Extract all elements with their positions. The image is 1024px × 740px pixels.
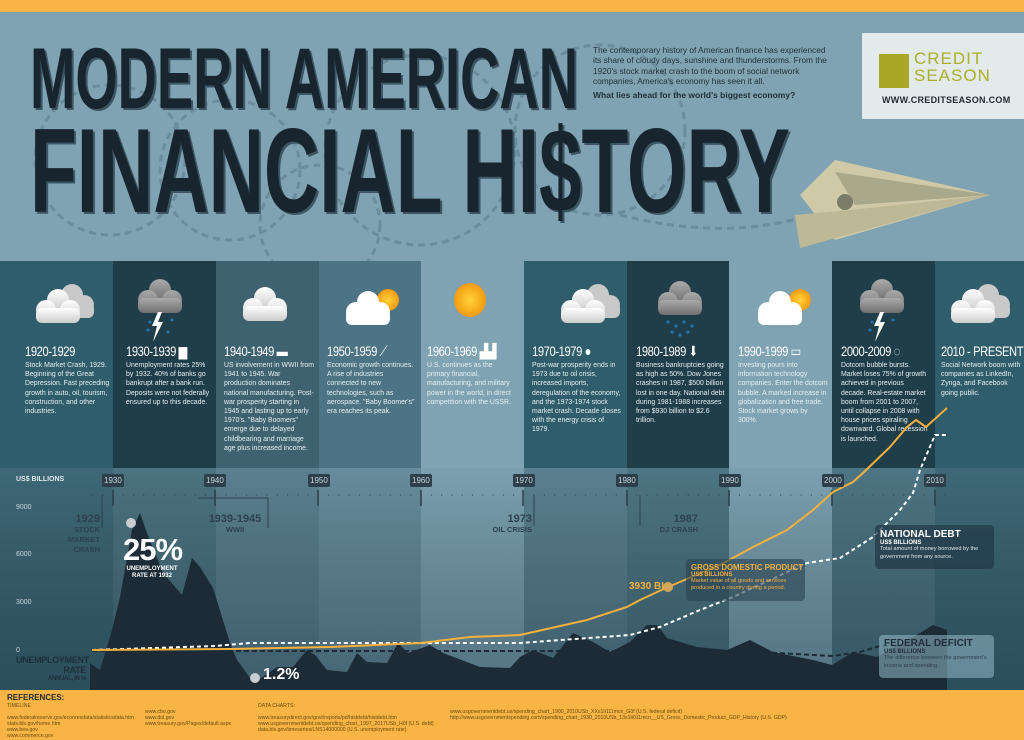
references: www.dol.gov [145, 715, 174, 721]
label: unemployment rate: ANNUAL, IN % [48, 676, 86, 682]
callout: federal deficit: The difference between the government's income and spending. [884, 655, 987, 668]
decade: 1960s: U.S. continues as the primary financial, manufacturing, and military power in the world, in direct competition with the USSR. [427, 362, 511, 406]
decade: 1990s: 1990-1999 ▭ [738, 343, 801, 359]
year labels: 1930 [104, 476, 122, 485]
icon: cloudy 1970s [561, 284, 620, 323]
event: 1929 crash [68, 513, 100, 554]
text: 9000 [16, 504, 32, 511]
decade columns [0, 261, 113, 468]
text: 2010 [926, 476, 944, 485]
references: TIMELINE [7, 703, 31, 709]
label: 3930 BI: 3930 BI [629, 581, 664, 592]
decade: 2010: 2010 - PRESENT [941, 343, 1023, 359]
references: www.usgovernmentdebt.us/spending_chart_1997_2017USb_H0f (U.S. debt) [258, 721, 434, 727]
decade: 1960s: 1960-1969 ▟▟ [427, 343, 496, 359]
callout: national debt: NATIONAL DEBT [880, 529, 961, 540]
decade: 1970s: Post-war prosperity ends in 1973 due to oil crisis, increased imports, deregulation of the economy, and the 1973-1974 stock market crash. Decade closes with the energy crisis of 1979. [532, 362, 621, 433]
decade: 1950s: 1950-1959 ⟋ [327, 343, 387, 359]
references: www.cbo.gov [145, 709, 176, 715]
event: WWII: 1939-1945 [209, 513, 261, 525]
text: 1980 [618, 476, 636, 485]
icon: sun cloud 1990s [758, 289, 811, 325]
event: oil crisis: 1973 [508, 513, 532, 525]
icon: storm 2000s [860, 279, 904, 342]
intro text: What lies ahead for the world's biggest economy? [593, 90, 795, 100]
label: unemployment rate: UNEMPLOYMENT [16, 655, 89, 665]
event: 1929 crash: STOCK [74, 525, 100, 534]
callout: GDP [686, 559, 805, 601]
decade: 1960s [427, 342, 511, 406]
event: DJ crash [660, 513, 698, 534]
decade: 1940s: 1940-1949 ▬ [224, 343, 287, 359]
decorative dashed circles [34, 44, 794, 261]
icon: cloud 1940s [243, 287, 287, 321]
weather icons [36, 279, 1010, 342]
decade: 1950s: Economic growth continues. A rise of industries connected to new technologies, such as aerospace. "Baby Boomer's" era reaches its peak. [327, 362, 414, 415]
references: DATA CHARTS: [258, 703, 295, 709]
callout: 1.2%: 1.2% [263, 666, 299, 683]
references: www.commerce.gov [7, 733, 53, 739]
callout: 25%: RATE AT 1932 [132, 573, 172, 579]
label: unemployment rate: RATE [63, 664, 86, 674]
decade: 1920s: Stock Market Crash, 1929. Beginning of the Great Depression. Fast preceding growth in auto, oil, tourism, construction, and other industries. [25, 362, 109, 415]
icon: cloudy 1920s [36, 284, 94, 323]
decade: 1990s: Investing pours into information technology companies. Enter the dotcom bubble. A marked increase in globalization and free trade. Stock market grows by 300%. [738, 362, 828, 424]
event: WWII: WWII [226, 525, 244, 534]
decade: 1930s: 1930-1939 ▆ [126, 343, 187, 359]
federal deficit line [92, 645, 947, 656]
logo [862, 33, 1024, 119]
text: 2000 [824, 476, 842, 485]
unemployment area [90, 513, 947, 690]
callout: 25%: UNEMPLOYMENT [126, 566, 178, 572]
icon: rain 1980s [658, 281, 702, 337]
callout: GDP: Market value of all goods and services produced in a country during a period. [691, 578, 786, 591]
event: WWII [209, 513, 261, 534]
text: 1970 [515, 476, 533, 485]
icon: storm 1930s [138, 279, 182, 342]
text: 1940 [206, 476, 224, 485]
callout: 25%: 25% [123, 532, 182, 567]
references: http://www.usgovernmentspending.com/spending_chart_1930_2010USb_13s1li011mcn__US_Gross_Domestic_Product_GDP_History (U.S. GDP) [450, 715, 787, 721]
chart [0, 407, 1024, 690]
event: 1929 crash: 1929 [76, 513, 100, 525]
event: oil crisis [492, 513, 532, 534]
title [30, 31, 792, 230]
references: www.treasury.gov/Pages/default.aspx [145, 721, 231, 727]
text: 1950 [310, 476, 328, 485]
intro text: The contemporary history of American finance has experienced its share of cloudy days, sunshine and thunderstorms. From the 1920's stock market crash to the boom of social network companies, America's economy has seen it all. [593, 45, 827, 86]
event: 1929 crash: MARKET [68, 535, 100, 544]
GDP line [92, 408, 947, 650]
decade: 1970s: 1970-1979 ● [532, 343, 591, 359]
callout: federal deficit: US$ BILLIONS [884, 649, 925, 655]
decade: 2000s: 2000-2009 ◌ [841, 343, 900, 359]
callout: national debt [875, 525, 994, 569]
text: 0 [16, 647, 20, 654]
text: 3000 [16, 599, 32, 606]
icon: sun cloud 1950s [346, 289, 399, 325]
decade: 1920s: 1920-1929 [25, 343, 75, 359]
text: 6000 [16, 551, 32, 558]
logo: CREDIT [914, 49, 983, 68]
axis labels: US$ BILLIONS [16, 476, 64, 483]
event: oil crisis: OIL CRISIS [493, 525, 532, 534]
references: www.usgovernmentdebt.us/spending_chart_1900_2010USb_XXs1li111mcn_G0f (U.S. federal deficit) [450, 709, 682, 715]
event: DJ crash: 1987 [674, 513, 698, 525]
icon: sun 1960s [454, 283, 486, 317]
decade: 1930s: Unemployment rates 25% by 1932. 40% of banks go bankrupt after a bank run. Deposits were not federally ensured up to this decade. [126, 362, 209, 406]
event: DJ crash: DJ CRASH [660, 525, 698, 534]
national debt line [92, 435, 947, 650]
callout: federal deficit: FEDERAL DEFICIT [884, 638, 973, 649]
text: 1990 [721, 476, 739, 485]
references: data.bls.gov/timeseries/LNS14000000 (U.S. unemployment rate) [258, 727, 406, 733]
logo: WWW.CREDITSEASON.COM [882, 95, 1010, 105]
decade: 1980s: Business bankruptcies going as high as 50%. Dow Jones crashes in 1987, $500 billion lost in one day. National debt during 1981-1988 increases from $930 billion to $2.6 trillion. [636, 362, 724, 424]
decade: 2010 [941, 343, 1024, 397]
references: www.federalreserve.gov/econresdata/statisticsdata.htm [7, 715, 134, 721]
callout: national debt: US$ BILLIONS [880, 540, 921, 546]
icon: dollar paper plane [795, 160, 990, 248]
decade: 1940s: US involvement in WWII from 1941 to 1945. War production dominates national manufacturing. Post-war prosperity starting in 1945 and lasting up to early 1970's. "Baby Boomers" emerge due to delayed childbearing and marriage age plus increased income. [224, 362, 314, 452]
references: stats.bls.gov/home.htm [7, 721, 60, 727]
top orange bar [0, 0, 1024, 12]
callout: GDP: GROSS DOMESTIC PRODUCT [691, 563, 803, 572]
references: www.bea.gov [7, 727, 38, 733]
year labels [102, 474, 124, 487]
event: 1929 crash: CRASH [73, 545, 100, 554]
callout: GDP: US$ BILLIONS [691, 572, 732, 578]
logo: SEASON [914, 66, 991, 85]
decade: 2010: Social Network boom with companies as LinkedIn, Zynga, and Facebook going public. [941, 362, 1020, 397]
callout: federal deficit [879, 635, 994, 678]
decade: 1930s [126, 343, 209, 406]
decade: 1980s: 1980-1989 ⬇ [636, 343, 698, 359]
icon: cloudy 2010 [951, 284, 1010, 323]
references: www.treasurydirect.gov/govt/reports/pd/histdebt/histdebt.htm [258, 715, 397, 721]
text: 1960 [412, 476, 430, 485]
references [0, 690, 1024, 740]
label: unemployment rate [16, 655, 90, 682]
callout: national debt: Total amount of money borrowed by the government from any source. [880, 546, 978, 560]
references: REFERENCES: [7, 693, 64, 702]
decade: 2000s: Dotcom bubble bursts. Market loses 75% of growth achieved in previous decade. Real-estate market boom from 2001 to 2007, until collapse in 2008 with house prices spiraling downward. Global recession is launched. [841, 362, 928, 443]
